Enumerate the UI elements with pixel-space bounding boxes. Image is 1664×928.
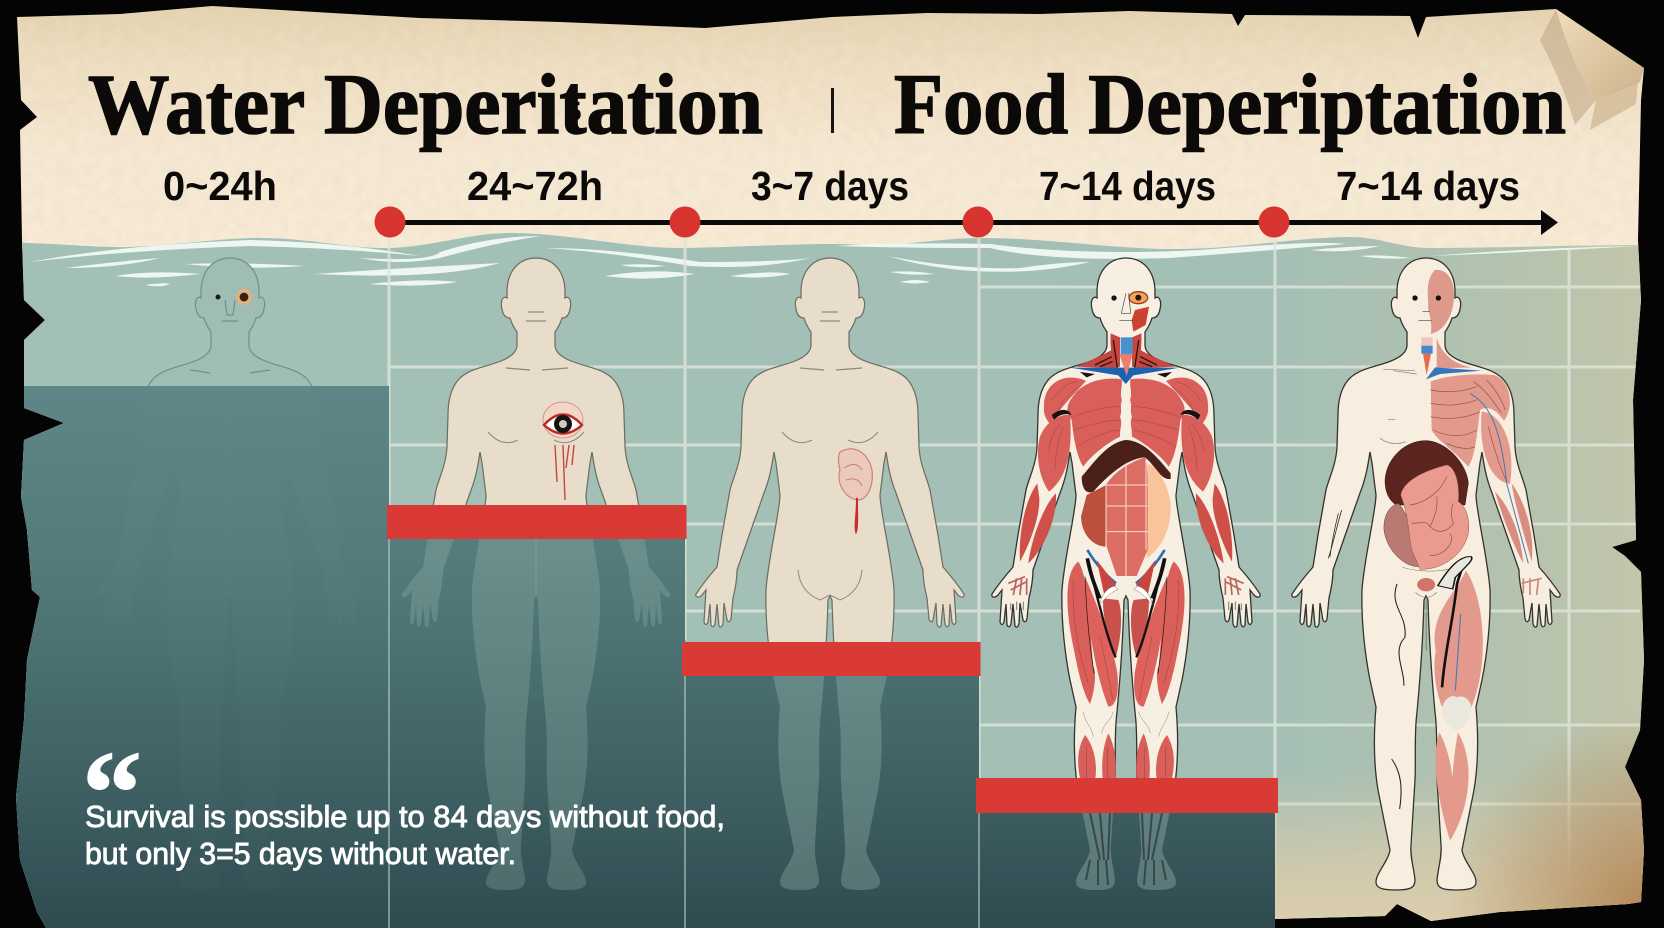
figure 3: body with stomach xyxy=(696,258,964,890)
lower half: bladder, femur and leg muscles xyxy=(1392,557,1483,841)
title: Water Deperitation: Water Deperitation xyxy=(88,56,763,152)
folded paper corner xyxy=(1540,9,1644,130)
lower muscles xyxy=(1067,560,1185,778)
figure 4: muscle anatomy body xyxy=(992,258,1260,890)
callout: survival quote: Survival is possible up to 84 days without food, xyxy=(85,799,725,834)
figure 1: submerged body xyxy=(96,258,364,890)
water surface highlights xyxy=(30,236,1640,286)
icon: eye on chest xyxy=(543,402,583,500)
liver xyxy=(1385,441,1468,505)
deep water steps xyxy=(16,386,1275,928)
intestines xyxy=(1401,465,1469,569)
figure 5: organ anatomy body xyxy=(1292,258,1560,890)
callout: survival quote: but only 3=5 days without water. xyxy=(85,836,516,871)
red bar step 2 xyxy=(387,505,686,539)
callout: survival quote xyxy=(85,799,725,871)
side organ xyxy=(1384,503,1418,567)
time label: 7~14 days (last): 7~14 days xyxy=(1336,163,1520,209)
title divider xyxy=(831,88,834,133)
face details xyxy=(1111,292,1149,332)
time label: 0~24h: 0~24h xyxy=(163,163,277,209)
abdomen xyxy=(1081,457,1171,576)
icon: stomach with bleed xyxy=(838,449,872,534)
thin lines in deep water xyxy=(389,539,979,928)
upper muscles xyxy=(1008,292,1244,610)
time label: 7~14 days: 7~14 days xyxy=(1039,163,1216,209)
timeline arrow xyxy=(374,206,1558,238)
liver band xyxy=(1082,440,1171,492)
time label: 24~72h: 24~72h xyxy=(467,163,603,209)
title: Food Deperiptation: Food Deperiptation xyxy=(894,56,1566,152)
red bar step 4 xyxy=(976,778,1278,813)
figure 2: body with eye xyxy=(402,258,670,890)
water grid lines xyxy=(389,237,1640,900)
submerged silhouettes xyxy=(402,539,1176,890)
red bar step 3 xyxy=(682,642,980,676)
upper half organs and muscles xyxy=(1328,270,1542,595)
neck and trachea xyxy=(1070,337,1180,384)
time label: 3~7 days: 3~7 days xyxy=(751,163,909,209)
title glitch mark: 5 xyxy=(568,96,582,126)
icon: quotation mark: “ xyxy=(82,726,142,859)
panel: shallow water xyxy=(0,233,1664,928)
